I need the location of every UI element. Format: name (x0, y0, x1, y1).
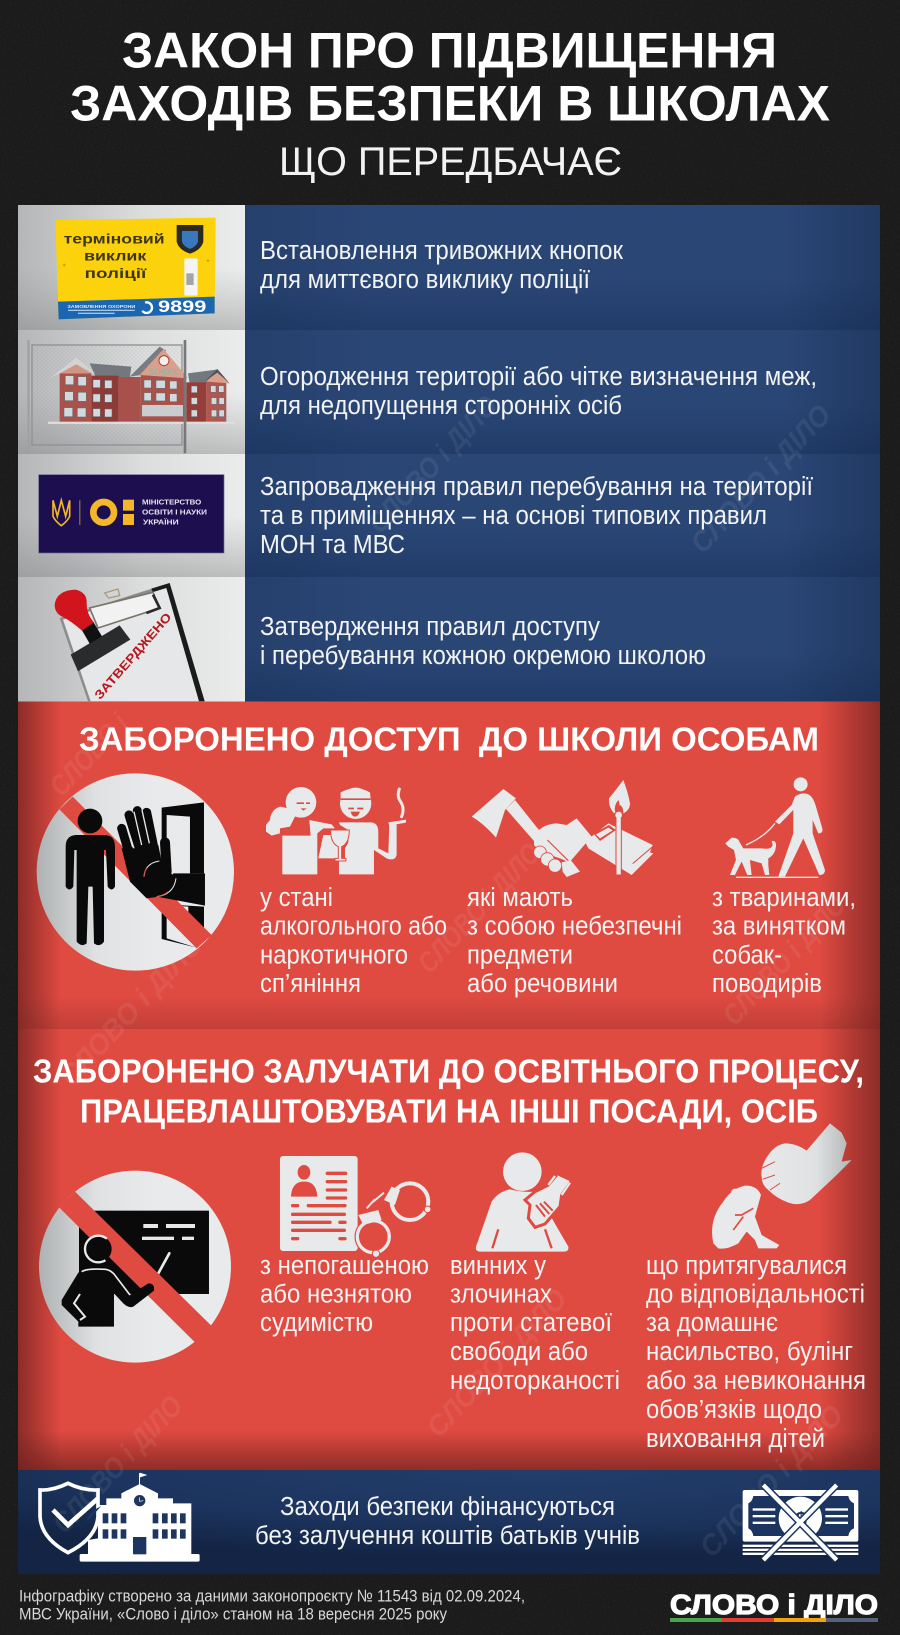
subtitle: ЩО ПЕРЕДБАЧАЄ (279, 140, 622, 184)
access ban item texts: алкогольного або (260, 912, 447, 940)
icon: crossed out money: $ (795, 1508, 807, 1531)
source note (19, 1586, 525, 1624)
panel: access ban (18, 702, 880, 1029)
access ban item texts: які мають (467, 884, 573, 912)
image: police call button plate (55, 218, 216, 319)
employment ban item texts: обов’язків щодо (646, 1396, 822, 1424)
watermarks: СЛОВО і ДІЛО (717, 889, 853, 1032)
employment ban item texts (260, 1252, 866, 1453)
watermarks: СЛОВО і ДІЛО (685, 399, 838, 560)
heading: employment ban (33, 1052, 864, 1130)
measure texts: Огородження території або чітке визначення меж, (260, 363, 817, 391)
access ban item texts: за винятком (712, 912, 846, 940)
icon: shield and school (40, 1473, 200, 1562)
employment ban item texts: винних у (450, 1252, 546, 1280)
image: police call button plate: 9899 (158, 297, 206, 316)
icon: axe and matches (472, 780, 653, 877)
title: ЗАКОН ПРО ПІДВИЩЕННЯ (122, 22, 777, 78)
access ban item texts: поводирів (712, 970, 822, 998)
heading: access ban: ЗАБОРОНЕНО ДОСТУП ДО ШКОЛИ ОСОБАМ (79, 720, 819, 758)
access ban item texts: собак- (712, 942, 782, 970)
access ban item texts: у стані (260, 884, 333, 912)
employment ban item texts: свободи або (450, 1338, 588, 1366)
measure texts: для миттєвого виклику поліції (260, 266, 590, 294)
employment ban item texts: або незнятою (260, 1280, 412, 1308)
financing text: Заходи безпеки фінансуються (280, 1493, 615, 1521)
icon: drunk people (266, 787, 406, 874)
panel: financing (18, 1470, 880, 1574)
source note: МВС України, «Слово і діло» станом на 18 вересня 2025 року (19, 1604, 447, 1624)
measure texts (260, 237, 817, 670)
watermarks: СЛОВО і ДІЛО (694, 1399, 850, 1564)
measure texts: та в приміщеннях – на основі типових правил (260, 502, 767, 530)
watermarks: СЛОВО і ДІЛО (362, 390, 505, 540)
image: approved stamp on clipboard: ЗАТВЕРДЖЕНО (92, 610, 175, 702)
watermarks: СЛОВО і ДІЛО (47, 1390, 190, 1540)
watermarks (44, 390, 853, 1564)
source note: Інфографіку створено за даними законопроєкту № 11543 від 02.09.2024, (19, 1586, 525, 1606)
employment ban item texts: недоторканості (450, 1367, 620, 1395)
employment ban item texts: судимістю (260, 1309, 373, 1337)
icon: sexual offender (476, 1152, 571, 1252)
measure texts: МОН та МВС (260, 531, 405, 559)
employment ban item texts: злочинах (450, 1280, 552, 1308)
icon: no teacher (39, 1171, 231, 1363)
employment ban item texts: виховання дітей (646, 1425, 825, 1453)
watermarks: СЛОВО і ДІЛО (421, 1283, 574, 1444)
financing text: без залучення коштів батьків учнів (255, 1522, 640, 1550)
image: police call button plate: ЗАМОВЛЕННЯ ОХОРОНИ (67, 304, 135, 309)
access ban item texts: з тваринами, (712, 884, 856, 912)
image: police call button plate: поліції (85, 265, 148, 281)
image: ministry of education logo: УКРАЇНИ (143, 519, 179, 527)
watermarks: СЛОВО і (44, 707, 136, 803)
image: ministry of education logo: ОСВІТИ І НАУКИ (142, 510, 207, 517)
panel: employment ban (18, 1029, 880, 1470)
access ban item texts: з собою небезпечні (467, 912, 682, 940)
measure texts: Запровадження правил перебування на території (260, 473, 813, 501)
employment ban item texts: що притягувалися (646, 1252, 847, 1280)
logo: СЛОВО і ДІЛО (670, 1589, 878, 1620)
image: ministry of education logo: МІНІСТЕРСТВО (142, 500, 202, 507)
access ban item texts: предмети (467, 942, 573, 970)
watermarks: СЛОВО і ДІЛО (412, 837, 548, 980)
image: ministry of education logo (39, 475, 224, 553)
panel: measures (18, 205, 880, 702)
access ban item texts: або речовини (467, 970, 618, 998)
icon: person walking a dog (725, 777, 825, 878)
icon: no entry person and door (37, 773, 234, 971)
image: police call button plate: виклик (84, 247, 146, 263)
measure texts: і перебування кожною окремою школою (260, 642, 706, 670)
title: ЗАХОДІВ БЕЗПЕКИ В ШКОЛАХ (70, 76, 830, 132)
employment ban item texts: або за невиконання (646, 1367, 866, 1395)
employment ban item texts: проти статевої (450, 1309, 612, 1337)
watermarks: СЛОВО і ДІЛО (54, 928, 210, 1093)
employment ban item texts: з непогашеною (260, 1252, 429, 1280)
heading: employment ban: ПРАЦЕВЛАШТОВУВАТИ НА ІНШІ ПОСАДИ, ОСІБ (80, 1092, 818, 1130)
title (70, 22, 830, 132)
icon: fist and curled child (712, 1123, 852, 1249)
icon: criminal record and handcuffs (280, 1156, 431, 1257)
access ban item texts: сп’яніння (260, 970, 361, 998)
image: fenced school building (27, 340, 235, 453)
image: approved stamp on clipboard (55, 583, 205, 702)
access ban item texts (260, 884, 856, 998)
financing text (255, 1493, 640, 1550)
measure texts: Встановлення тривожних кнопок (260, 237, 624, 265)
employment ban item texts: насильство, булінг (646, 1338, 853, 1366)
icon: crossed out money (743, 1485, 858, 1560)
employment ban item texts: за домашнє (646, 1309, 778, 1337)
measure texts: Затвердження правил доступу (260, 613, 600, 641)
image: police call button plate: терміновий (64, 231, 165, 247)
heading: employment ban: ЗАБОРОНЕНО ЗАЛУЧАТИ ДО ОСВІТНЬОГО ПРОЦЕСУ, (33, 1052, 864, 1090)
access ban item texts: наркотичного (260, 942, 408, 970)
employment ban item texts: до відповідальності (646, 1280, 865, 1308)
measure texts: для недопущення сторонніх осіб (260, 392, 622, 420)
image: fenced school building: SCHOOL (149, 366, 179, 376)
